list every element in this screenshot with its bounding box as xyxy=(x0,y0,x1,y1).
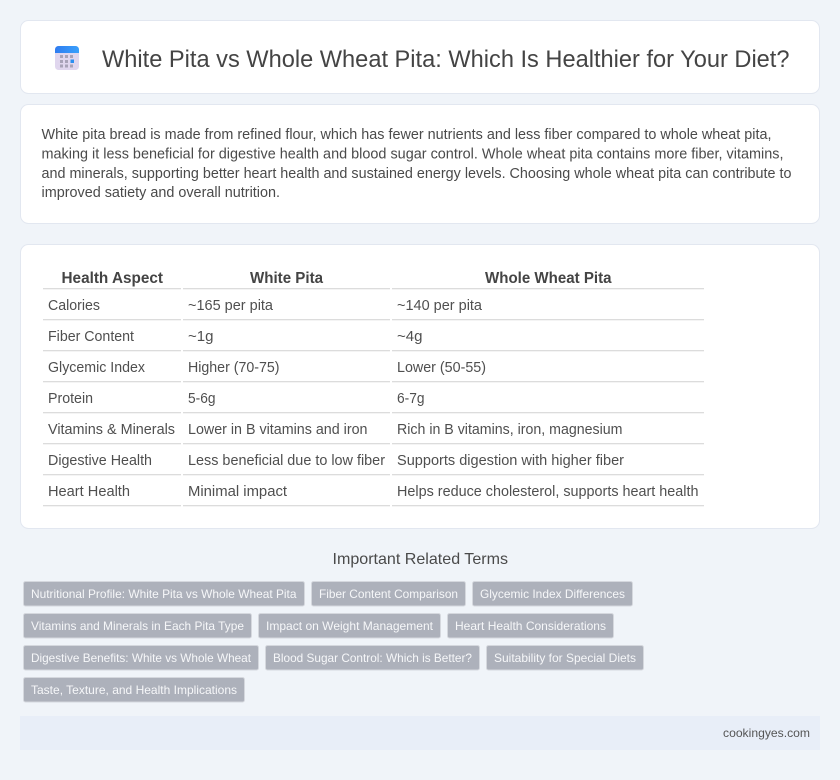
row: fiber content: ~1g xyxy=(188,329,214,345)
tag xyxy=(24,678,244,702)
row: fiber content xyxy=(48,329,422,345)
header panel xyxy=(20,20,820,94)
tag xyxy=(258,614,440,638)
table header row xyxy=(62,270,612,287)
row: heart health: Minimal impact xyxy=(188,484,287,500)
tag: Nutritional Profile: White Pita vs Whole Wheat Pita xyxy=(31,587,297,601)
tag xyxy=(448,614,614,638)
tag: Digestive Benefits: White vs Whole Wheat xyxy=(31,651,252,665)
row: protein: Protein xyxy=(48,391,93,407)
tag xyxy=(486,646,644,670)
tag xyxy=(24,614,252,638)
footer source text: cookingyes.com xyxy=(723,726,810,740)
tag: Blood Sugar Control: Which is Better? xyxy=(273,651,472,665)
tag xyxy=(24,582,304,606)
tag: Vitamins and Minerals in Each Pita Type xyxy=(31,619,244,633)
row: digestive health: Less beneficial due to low fiber xyxy=(188,453,385,469)
row: fiber content: ~4g xyxy=(397,329,422,345)
tag: Glycemic Index Differences xyxy=(480,587,625,601)
row: calories: Calories xyxy=(48,298,100,314)
tag xyxy=(312,582,466,606)
table header row: Health Aspect xyxy=(62,270,164,287)
row: digestive health: Digestive Health xyxy=(48,453,152,469)
tag: Fiber Content Comparison xyxy=(319,587,458,601)
row: vitamins and minerals xyxy=(48,422,622,438)
tag: Suitability for Special Diets xyxy=(494,651,636,665)
row: vitamins and minerals: Lower in B vitamins and iron xyxy=(188,422,368,438)
panel: comparison table xyxy=(20,244,820,528)
footer bar xyxy=(20,716,820,750)
row: glycemic index: Lower (50-55) xyxy=(397,360,486,376)
panel: summary paragraph: improved satiety and overall nutrition. xyxy=(42,185,280,201)
row: calories: ~140 per pita xyxy=(397,298,483,314)
panel: summary paragraph: White pita bread is made from refined flour, which has fewer nutrients and less fiber compared to whole wheat pita, xyxy=(42,127,772,143)
row: heart health: Helps reduce cholesterol, supports heart health xyxy=(397,484,698,500)
row: protein xyxy=(48,391,424,407)
row: protein: 6-7g xyxy=(397,391,424,407)
row: calories xyxy=(48,298,483,314)
row: protein: 5-6g xyxy=(188,391,216,407)
row: glycemic index: Glycemic Index xyxy=(48,360,146,376)
tag xyxy=(266,646,480,670)
icon: calendar xyxy=(55,46,79,70)
panel: summary paragraph: making it less beneficial for digestive health and blood sugar control. Whole wheat pita contains more fiber, vitamins, xyxy=(42,146,784,162)
title: White Pita vs Whole Wheat Pita: Which Is Healthier for Your Diet? xyxy=(102,46,790,73)
row: heart health: Heart Health xyxy=(48,484,130,500)
row: vitamins and minerals: Vitamins & Minerals xyxy=(48,422,175,438)
panel: summary paragraph xyxy=(20,104,820,224)
heading: related terms: Important Related Terms xyxy=(332,551,508,568)
tag xyxy=(472,582,632,606)
row: fiber content: Fiber Content xyxy=(48,329,134,345)
row: glycemic index xyxy=(48,360,486,376)
row: digestive health: Supports digestion with higher fiber xyxy=(397,453,624,469)
tag: Impact on Weight Management xyxy=(266,619,434,633)
row: digestive health xyxy=(48,453,624,469)
panel: summary paragraph: and minerals, supporting better heart health and sustained energy levels. Choosing whole wheat pita can contribute to xyxy=(42,166,792,182)
tag list: related terms xyxy=(24,582,644,702)
row: heart health xyxy=(48,484,698,500)
table header row: Whole Wheat Pita xyxy=(485,270,612,287)
row: glycemic index: Higher (70-75) xyxy=(188,360,280,376)
row: calories: ~165 per pita xyxy=(188,298,274,314)
row: vitamins and minerals: Rich in B vitamins, iron, magnesium xyxy=(397,422,622,438)
table header row: White Pita xyxy=(250,270,323,287)
tag: Heart Health Considerations xyxy=(455,619,606,633)
tag xyxy=(24,646,258,670)
tag: Taste, Texture, and Health Implications xyxy=(31,683,237,697)
